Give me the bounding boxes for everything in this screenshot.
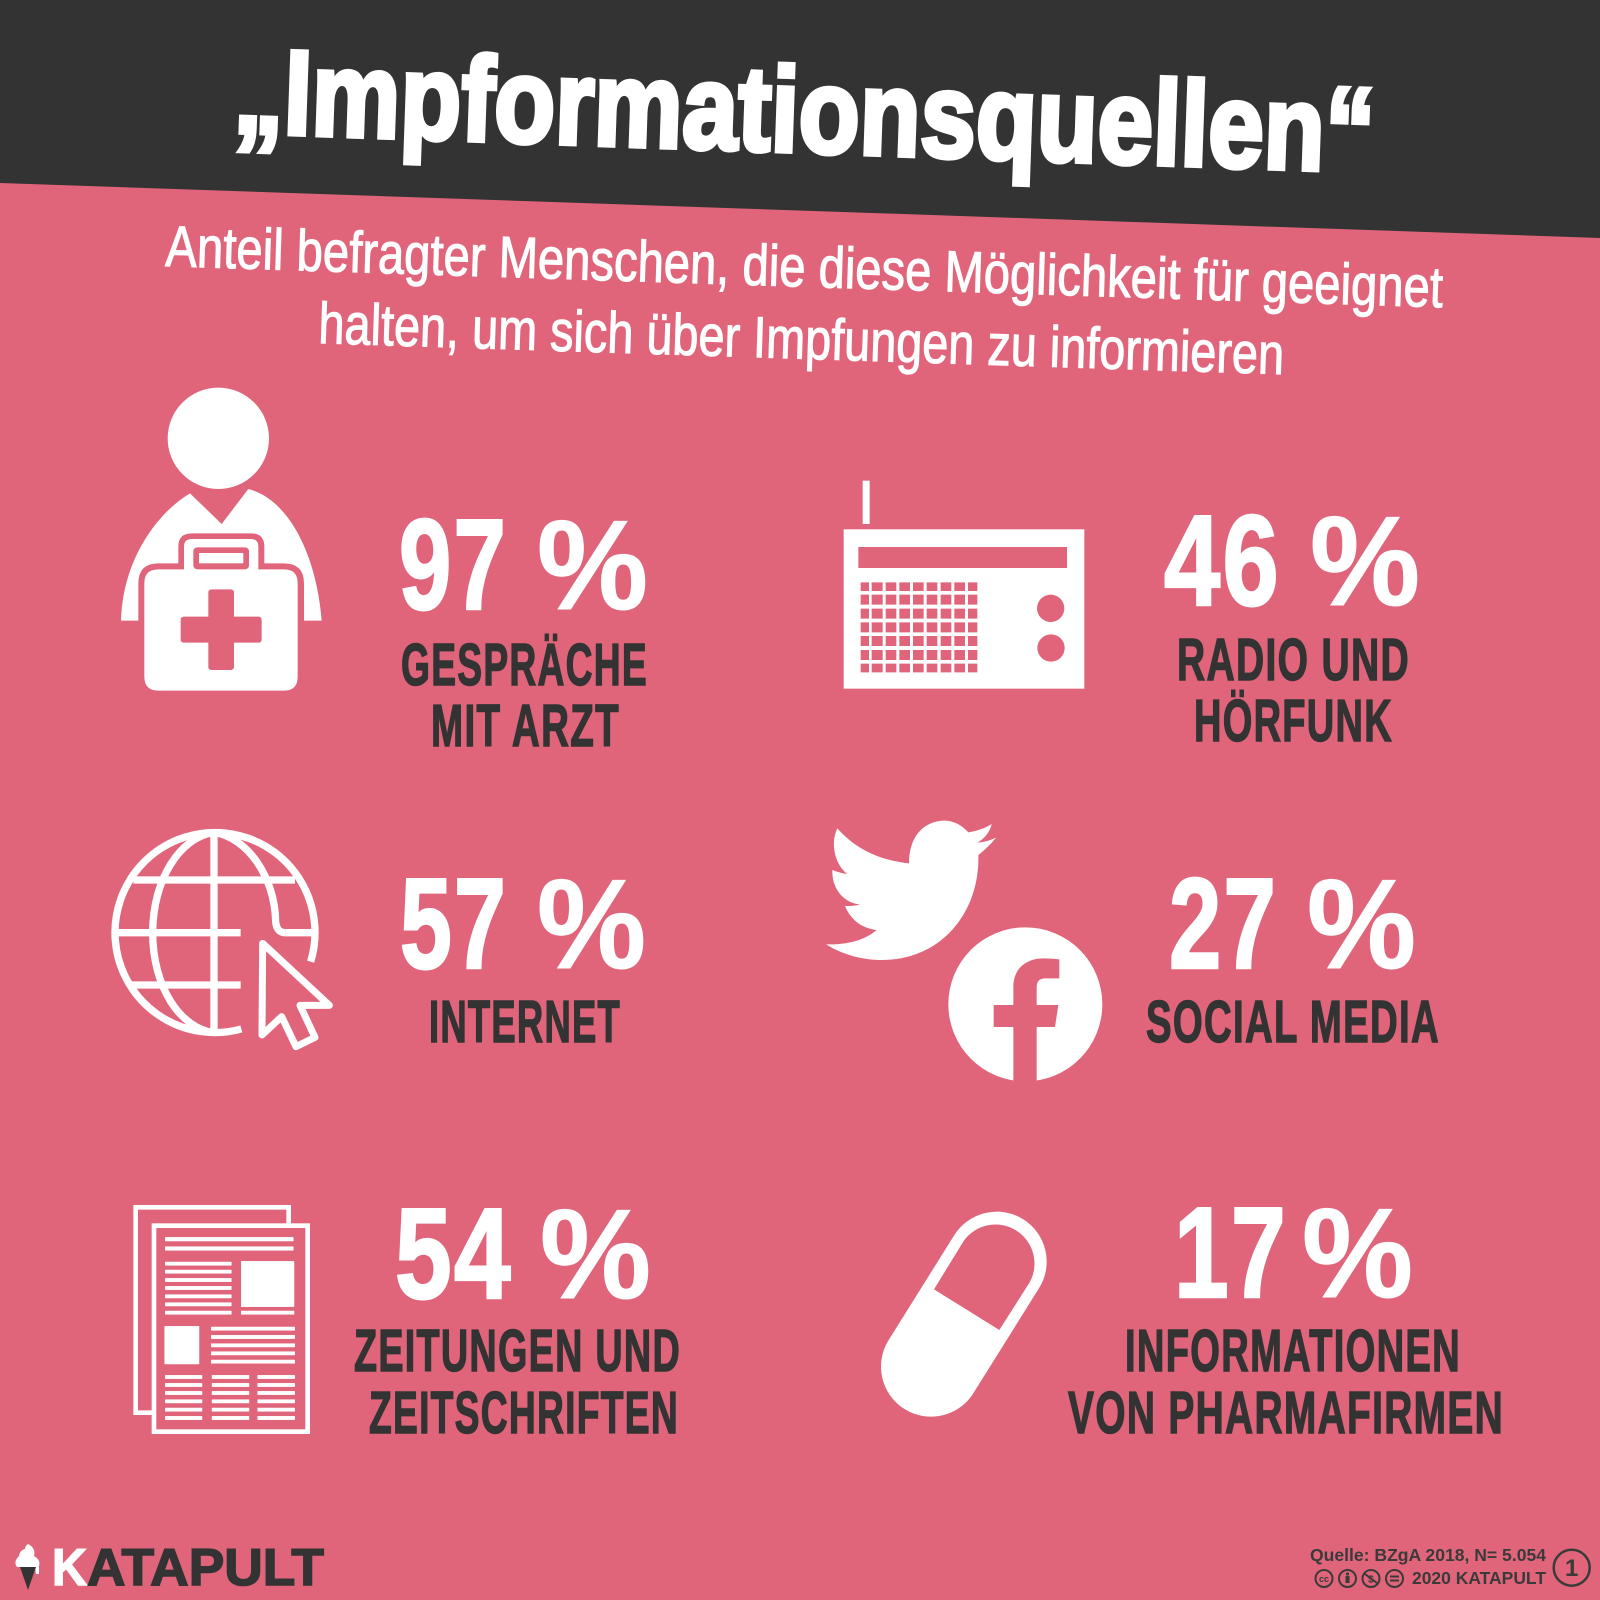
icon: newspapers: [136, 1207, 308, 1432]
label: Radio und Hörfunk: [1177, 627, 1410, 754]
percentage: 97 %: 97: [399, 493, 508, 637]
label: Social Media: SOCIAL MEDIA: [1146, 989, 1440, 1055]
label: Gespräche mit Arzt: [401, 632, 648, 759]
copyright line with licence icons: [1316, 1568, 1546, 1588]
icon: doctor with medical bag: [121, 388, 322, 691]
percentage: 57 %: 57: [400, 852, 508, 996]
percentage: 27 %: %: [1307, 853, 1416, 995]
percentage: 17 %: %: [1302, 1182, 1413, 1324]
icon: twitter and facebook: [826, 821, 1102, 1082]
edition number badge: 1: [1565, 1555, 1578, 1582]
percentage: 57 %: %: [537, 853, 646, 995]
percentage: 17 %: 17: [1174, 1181, 1288, 1325]
percentage: 54 %: %: [540, 1183, 651, 1325]
percentage: 54 %: 54: [395, 1182, 513, 1326]
copyright line with licence icons: $: [1368, 1574, 1374, 1586]
label: Radio und Hörfunk: RADIO UND: [1177, 627, 1410, 693]
source text: Quelle: BZgA 2018, N= 5.054: [1310, 1545, 1546, 1565]
percentage: 57 %: [400, 852, 646, 996]
label: Zeitungen und Zeitschriften: [354, 1318, 681, 1446]
copyright line with licence icons: cc: [1319, 1574, 1329, 1584]
percentage: 97 %: %: [537, 494, 648, 636]
label: Zeitungen und Zeitschriften: ZEITSCHRIFTEN: [369, 1380, 679, 1446]
percentage: 46 %: [1164, 489, 1420, 633]
icon: pill capsule: [931, 1225, 1034, 1367]
label: Internet: INTERNET: [429, 989, 621, 1055]
label: Gespräche mit Arzt: MIT ARZT: [431, 693, 620, 759]
percentage: 27 %: [1169, 852, 1416, 996]
percentage: 27 %: 27: [1169, 852, 1278, 996]
label: Radio und Hörfunk: HÖRFUNK: [1194, 688, 1393, 754]
label: Gespräche mit Arzt: GESPRÄCHE: [401, 632, 648, 698]
percentage: 46 %: 46: [1164, 489, 1281, 633]
label: Zeitungen und Zeitschriften: ZEITUNGEN UND: [354, 1318, 681, 1384]
logo: Katapult: ATAPULT: [87, 1539, 324, 1597]
label: Informationen von Pharmafirmen: [1068, 1318, 1504, 1446]
edition number badge: [1554, 1550, 1590, 1586]
icon: globe with cursor: [114, 833, 329, 1047]
title: „Impformationsquellen“: [232, 24, 1377, 198]
subtitle: [165, 214, 1444, 387]
percentage: 54 %: [395, 1182, 651, 1326]
percentage: 97 %: [399, 493, 648, 637]
header band: [0, 0, 1600, 238]
copyright line with licence icons: 2020 KATAPULT: [1412, 1568, 1546, 1588]
logo: Katapult: K: [52, 1539, 87, 1597]
subtitle: halten, um sich über Impfungen zu informieren: [318, 291, 1285, 387]
icon: radio: [844, 481, 1084, 689]
percentage: 46 %: %: [1310, 490, 1420, 632]
percentage: 17 %: [1174, 1181, 1413, 1325]
